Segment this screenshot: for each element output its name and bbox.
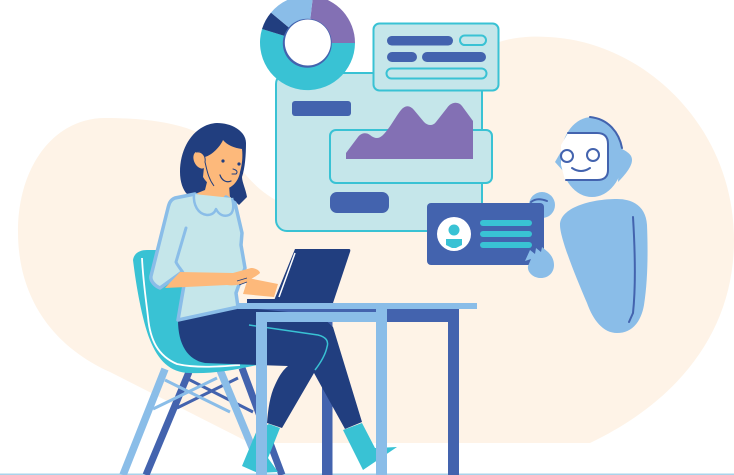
knee seam — [249, 325, 328, 370]
dashboard lower button — [330, 192, 389, 213]
area chart card — [330, 103, 492, 183]
floor line — [0, 474, 734, 475]
chair — [123, 250, 282, 475]
chair shell — [133, 250, 257, 373]
face details — [220, 159, 241, 182]
robot front hand — [525, 247, 554, 278]
dashboard header button — [292, 101, 351, 116]
hair back — [180, 123, 247, 205]
far arm — [243, 278, 278, 297]
purple area chart — [346, 103, 473, 159]
robot back hand — [529, 192, 555, 218]
table front frame — [238, 303, 477, 475]
table back frame — [257, 309, 459, 475]
woman — [151, 123, 397, 473]
near arm and hand — [165, 268, 260, 288]
trousers — [178, 307, 362, 429]
sleeve line — [176, 228, 186, 277]
robot — [529, 117, 648, 333]
robot body — [560, 199, 648, 333]
collar — [194, 194, 233, 216]
donut chart — [260, 0, 355, 90]
face — [203, 140, 242, 189]
avatar — [437, 217, 471, 251]
form card — [374, 24, 498, 90]
chair legs — [123, 368, 282, 475]
robot head — [555, 117, 632, 197]
socks and shoes — [242, 423, 397, 473]
blouse — [151, 194, 245, 320]
ear — [191, 149, 209, 171]
main dashboard panel — [276, 73, 482, 231]
neck — [195, 178, 230, 207]
profile ID card — [427, 203, 544, 265]
laptop — [247, 249, 350, 303]
